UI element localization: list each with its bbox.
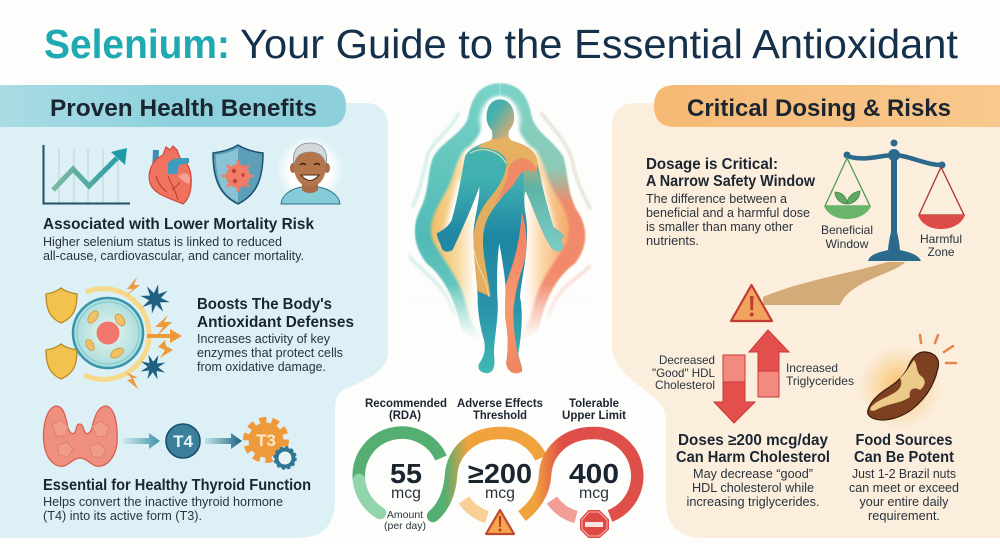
text: harm cholesterol: increasing triglycerides. xyxy=(686,495,820,509)
icon: T3 gear xyxy=(246,420,296,468)
text: lower mortality risk: all-cause, cardiovascular, and cancer mortality. xyxy=(43,249,304,263)
heading: critical dosing and risks: Critical Dosing & Risks xyxy=(687,95,951,122)
text: narrow safety window: is smaller than many other xyxy=(646,220,793,234)
text: lower mortality risk: Associated with Lower Mortality Risk xyxy=(43,216,314,233)
label: beneficial window: Beneficial xyxy=(821,223,873,237)
aura: outer wisps xyxy=(409,113,590,317)
central body figure with aura xyxy=(409,83,590,377)
text: antioxidant defenses xyxy=(197,296,354,374)
label: harmful zone xyxy=(920,232,962,259)
icon: T4 badge xyxy=(166,424,200,458)
text: narrow safety window xyxy=(646,156,816,248)
text: thyroid function: Essential for Healthy Thyroid Function xyxy=(43,477,311,494)
arrow: triglycerides up xyxy=(749,330,789,397)
arrow: HDL down xyxy=(714,355,755,423)
gauge: tolerable upper limit: Upper Limit xyxy=(562,410,626,422)
label: increased triglycerides xyxy=(786,361,854,388)
gauge: tolerable upper limit: Tolerable xyxy=(569,398,619,410)
gauges: dosage levels xyxy=(359,398,637,539)
text: narrow safety window: Dosage is Critical: xyxy=(646,156,778,173)
text: food sources: your entire daily xyxy=(860,495,949,509)
text: food sources: Just 1-2 Brazil nuts xyxy=(852,467,956,481)
gauge: recommended RDA: Recommended xyxy=(365,398,447,410)
text: food sources: can meet or exceed xyxy=(849,481,959,495)
text: harm cholesterol: Doses ≥200 mcg/day xyxy=(678,432,828,449)
icon: smiling elderly person xyxy=(276,136,344,204)
text: food sources: Can Be Potent xyxy=(854,449,954,466)
text: food sources: requirement. xyxy=(868,509,940,523)
title: Selenium: xyxy=(44,21,230,67)
icon: rising line chart xyxy=(44,145,130,204)
label: increased triglycerides: Increased xyxy=(786,361,838,375)
icon: T4 badge: T4 xyxy=(173,432,193,451)
gauge: tolerable upper limit: 400 xyxy=(569,458,619,489)
text: narrow safety window: A Narrow Safety Window xyxy=(646,173,816,190)
label: harmful zone: Harmful xyxy=(920,232,962,246)
gauge: recommended RDA: (per day) xyxy=(384,520,426,532)
text: food sources: Food Sources xyxy=(856,432,952,449)
text: antioxidant defenses: Increases activity of key xyxy=(197,332,331,346)
text: harm cholesterol: HDL cholesterol while xyxy=(692,481,814,495)
gauge: adverse effects threshold: Adverse Effects xyxy=(457,398,543,410)
text: lower mortality risk xyxy=(43,216,314,263)
heading: proven health benefits xyxy=(0,85,346,127)
gauge: tolerable upper limit: mcg xyxy=(579,485,609,502)
gauge: recommended RDA xyxy=(359,398,447,532)
gauge: recommended RDA: (RDA) xyxy=(389,410,421,422)
text: antioxidant defenses: enzymes that protect cells xyxy=(197,346,343,360)
icon: balance scale xyxy=(824,140,965,261)
text: antioxidant defenses: Boosts The Body's xyxy=(197,296,332,313)
panel: critical dosing and risks xyxy=(612,85,1000,538)
label: increased triglycerides: Triglycerides xyxy=(786,374,854,388)
text: harm cholesterol: Can Harm Cholesterol xyxy=(676,449,830,466)
icon: shield with virus xyxy=(213,145,263,204)
icon: cell with shields and free radicals xyxy=(46,277,182,389)
icon: T3 gear: T3 xyxy=(256,431,276,450)
text: narrow safety window: beneficial and a harmful dose xyxy=(646,206,810,220)
icon: anatomical heart xyxy=(149,146,191,204)
label: decreased HDL xyxy=(652,353,715,392)
aura: white halo around body xyxy=(445,97,555,363)
gauge: recommended RDA: 55 xyxy=(390,458,422,489)
arrow: thyroid to T4 xyxy=(123,433,160,449)
icon: thyroid gland xyxy=(44,406,117,466)
label: harmful zone: Zone xyxy=(928,245,955,259)
icon: brazil nut xyxy=(858,335,956,429)
panel background: benefits xyxy=(0,103,388,538)
gauge: adverse effects threshold: ≥200 xyxy=(468,458,532,489)
heading: critical dosing and risks xyxy=(654,85,1000,127)
text: harm cholesterol: May decrease “good” xyxy=(693,467,813,481)
aura: inner warm glow xyxy=(431,97,569,343)
label: decreased HDL: "Good" HDL xyxy=(652,366,715,380)
text: thyroid function: Helps convert the inactive thyroid hormone xyxy=(43,495,283,509)
text: narrow safety window: nutrients. xyxy=(646,234,699,248)
label: beneficial window: Window xyxy=(826,237,869,251)
label: decreased HDL: Decreased xyxy=(659,353,715,367)
text: food sources xyxy=(849,432,959,523)
label: decreased HDL: Cholesterol xyxy=(655,378,715,392)
icon: warning triangle xyxy=(731,285,772,321)
title: Your Guide to the Essential Antioxidant xyxy=(240,21,959,67)
heading: proven health benefits: Proven Health Benefits xyxy=(50,95,317,122)
gauge: recommended RDA: Amount xyxy=(387,509,423,521)
text: thyroid function xyxy=(43,477,311,523)
icon: warning triangle xyxy=(486,510,514,534)
text: thyroid function: (T4) into its active form (T3). xyxy=(43,509,202,523)
aura: lower fade xyxy=(410,283,590,350)
text: harm cholesterol xyxy=(676,432,830,509)
gauge: adverse effects threshold: mcg xyxy=(485,485,515,502)
panel background: dosing xyxy=(612,103,1000,538)
body silhouette xyxy=(436,99,564,374)
text: narrow safety window: The difference between a xyxy=(646,192,787,206)
label: beneficial window xyxy=(821,223,873,251)
aura: right wave xyxy=(500,83,585,343)
path from scale to warning xyxy=(763,262,905,305)
gauge: adverse effects threshold xyxy=(427,398,543,534)
arrow: T4 to T3 xyxy=(205,433,242,449)
gauge: recommended RDA: mcg xyxy=(391,485,421,502)
gauge: tolerable upper limit xyxy=(522,398,637,539)
text: antioxidant defenses: from oxidative damage. xyxy=(197,360,326,374)
panel: proven health benefits xyxy=(0,85,388,538)
gauge: adverse effects threshold: Threshold xyxy=(473,410,527,422)
aura: left wave xyxy=(415,83,500,343)
icon: stop sign xyxy=(579,509,610,539)
text: lower mortality risk: Higher selenium status is linked to reduced xyxy=(43,235,282,249)
text: antioxidant defenses: Antioxidant Defenses xyxy=(197,314,354,331)
